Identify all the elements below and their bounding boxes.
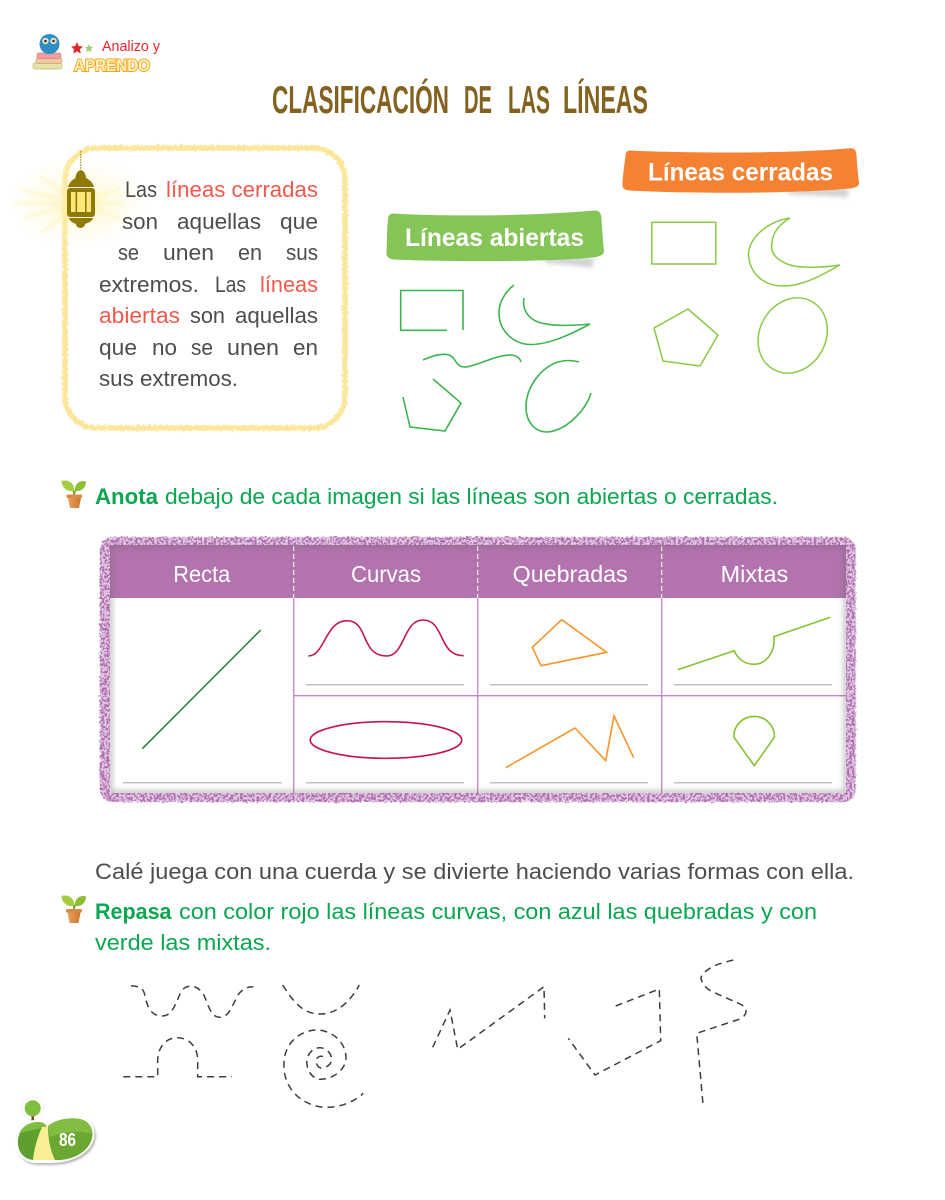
callout text: se xyxy=(191,335,213,360)
callout text: extremos. xyxy=(99,272,199,297)
callout text: son xyxy=(190,303,225,328)
closed shape: crescent xyxy=(748,218,840,286)
page badge xyxy=(16,1097,96,1165)
title: LAS xyxy=(508,79,550,122)
instruction text: con color rojo las líneas curvas, con azul las quebradas y con xyxy=(179,899,817,924)
open shape: pentagon xyxy=(403,379,461,431)
broken zigzag xyxy=(506,716,634,768)
dashed mixed line xyxy=(697,960,746,1108)
logo word: Aprendo: APRENDO xyxy=(74,56,150,75)
title: CLASIFICACIÓN xyxy=(272,78,449,122)
label: Líneas cerradas xyxy=(622,148,859,197)
dashed zigzag xyxy=(433,987,545,1049)
open shape: crescent xyxy=(499,285,590,345)
title: DE xyxy=(464,79,492,122)
callout text: unen xyxy=(227,335,279,360)
closed shape: rectangle xyxy=(652,222,716,264)
callout text: abiertas xyxy=(99,303,180,328)
callout text: líneas cerradas xyxy=(166,177,318,202)
label: Líneas abiertas: Líneas abiertas xyxy=(405,224,584,252)
callout text: se xyxy=(118,240,139,265)
callout text: son xyxy=(122,209,158,234)
callout text: en xyxy=(293,335,318,360)
instruction: Repasa xyxy=(62,895,817,955)
mixed line xyxy=(678,617,830,670)
text block: Calé: Calé juega con una cuerda y se divierte haciendo varias formas con ella. xyxy=(95,859,854,884)
dashed wave xyxy=(131,986,253,1017)
dashed bowl curve xyxy=(283,985,359,1014)
panel: líneas cerradas xyxy=(622,148,859,386)
closed shape: pentagon xyxy=(654,309,718,366)
dashed spiral xyxy=(284,1030,363,1107)
icon: sprout in pot xyxy=(62,895,86,923)
logo word: Analizo y: Analizo y xyxy=(102,38,160,55)
icon: sprout in pot xyxy=(62,480,86,508)
callout text: en xyxy=(238,240,262,265)
mixed drop shape xyxy=(734,716,774,766)
panel: line type table xyxy=(100,537,856,802)
table speckled border xyxy=(100,537,856,802)
icon: tree xyxy=(21,1097,44,1124)
callout text: que xyxy=(99,335,137,360)
table header xyxy=(110,545,846,598)
callout text: Las xyxy=(125,177,157,202)
straight line xyxy=(142,630,261,749)
curved ellipse xyxy=(310,722,462,758)
open shape: oval xyxy=(526,360,591,432)
open shape: rectangle xyxy=(401,290,463,330)
instruction text: verde las mixtas. xyxy=(95,930,271,955)
callout text: sus extremos. xyxy=(99,366,238,391)
callout text: sus xyxy=(286,240,318,265)
label: Líneas abiertas xyxy=(386,210,604,268)
broken quadrilateral xyxy=(532,620,607,666)
page number: 86 xyxy=(59,1130,76,1150)
table header: Quebradas xyxy=(513,561,628,587)
callout text: unen xyxy=(163,240,214,265)
callout text: líneas xyxy=(260,272,318,297)
table header: Mixtas xyxy=(721,561,788,587)
callout text xyxy=(99,177,318,391)
table header: Recta xyxy=(173,561,230,587)
callout text: aquellas xyxy=(177,209,261,234)
callout text: que xyxy=(280,209,318,234)
icon: green star xyxy=(85,44,93,52)
callout text: Las xyxy=(215,272,246,297)
callout text: aquellas xyxy=(235,303,318,328)
instruction text xyxy=(95,899,817,955)
icon: owl on books xyxy=(33,34,62,69)
panel: definition callout xyxy=(8,148,345,428)
dashed bump line xyxy=(123,1038,232,1077)
badge hills xyxy=(16,1116,96,1165)
dashed open polygon xyxy=(568,989,661,1075)
callout text: no xyxy=(152,335,177,360)
icon: lantern with glow xyxy=(8,151,152,249)
label: Líneas cerradas: Líneas cerradas xyxy=(648,158,833,186)
open shape: wavy line xyxy=(423,354,521,367)
instruction text: Anota xyxy=(95,484,158,509)
title: LÍNEAS xyxy=(563,78,648,122)
panel: líneas abiertas xyxy=(386,210,604,432)
callout frame xyxy=(65,148,345,428)
icon: red star xyxy=(71,42,83,54)
section logo: Analizo y Aprendo xyxy=(33,34,160,75)
table white panel xyxy=(110,545,846,793)
curved wave xyxy=(308,620,464,656)
closed shape: ellipse xyxy=(745,285,841,386)
dashed tracing lines xyxy=(123,960,746,1108)
instruction: Anota: debajo de cada imagen si las líneas son abiertas o cerradas. xyxy=(165,484,778,509)
table header: Curvas xyxy=(351,561,421,587)
instruction text: Repasa xyxy=(95,899,172,924)
